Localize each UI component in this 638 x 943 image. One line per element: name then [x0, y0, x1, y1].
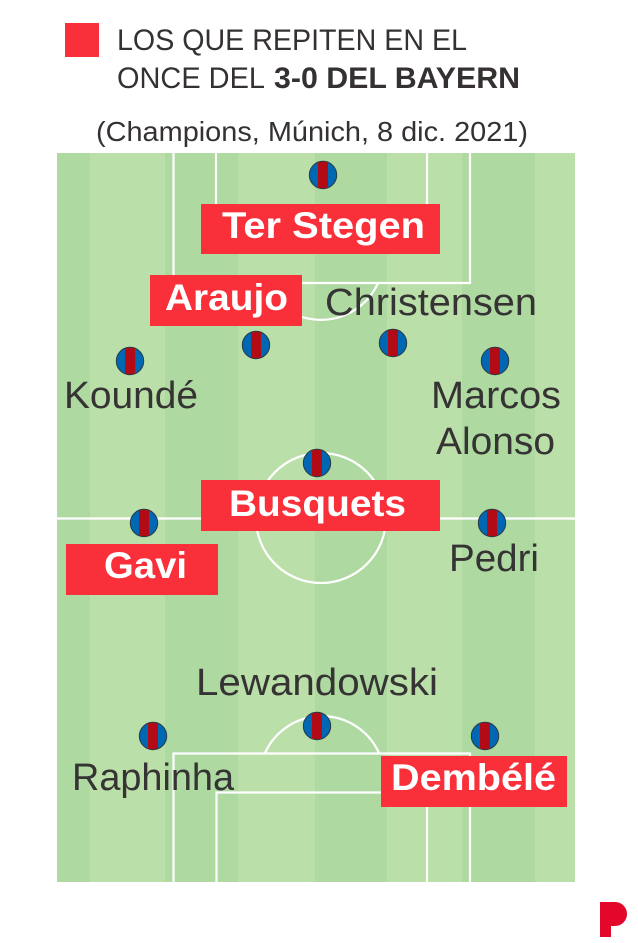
player: Raphinha: [72, 722, 235, 799]
player: Raphinha: Raphinha: [72, 757, 235, 799]
player: Koundé: Koundé: [64, 375, 198, 417]
legend red square: [65, 23, 99, 57]
player: Busquets: [201, 449, 440, 531]
player: Busquets: Busquets: [229, 483, 406, 524]
player: Gavi: Gavi: [104, 545, 187, 586]
player: Araujo: Araujo: [165, 277, 288, 318]
player: Christensen: Christensen: [325, 282, 537, 324]
player: Araujo: [150, 275, 302, 359]
player: Dembélé: [381, 722, 567, 807]
subtitle: (Champions, Múnich, 8 dic. 2021): [96, 116, 528, 147]
legend text: ONCE DEL: [117, 62, 265, 95]
football pitch: [57, 153, 575, 882]
player: Koundé: [64, 347, 198, 417]
player: Lewandowski: [196, 662, 438, 740]
player: Marcos Alonso: Alonso: [436, 421, 555, 463]
icon: publisher logo: [600, 902, 627, 937]
legend text: [117, 24, 520, 95]
player: Pedri: [449, 509, 539, 580]
player: Dembélé: Dembélé: [391, 757, 556, 798]
legend text: LOS QUE REPITEN EN EL: [117, 24, 467, 57]
player: Marcos Alonso: [431, 347, 561, 463]
player: Marcos Alonso: Marcos: [431, 375, 561, 417]
player: Pedri: Pedri: [449, 538, 539, 580]
player: Lewandowski: Lewandowski: [196, 662, 438, 704]
player: Christensen: [325, 282, 537, 357]
player: Ter Stegen: Ter Stegen: [222, 205, 425, 246]
legend text: 3-0 DEL BAYERN: [274, 62, 520, 95]
player: Ter Stegen: [201, 161, 440, 254]
legend: [65, 23, 520, 95]
player: Gavi: [66, 509, 218, 595]
